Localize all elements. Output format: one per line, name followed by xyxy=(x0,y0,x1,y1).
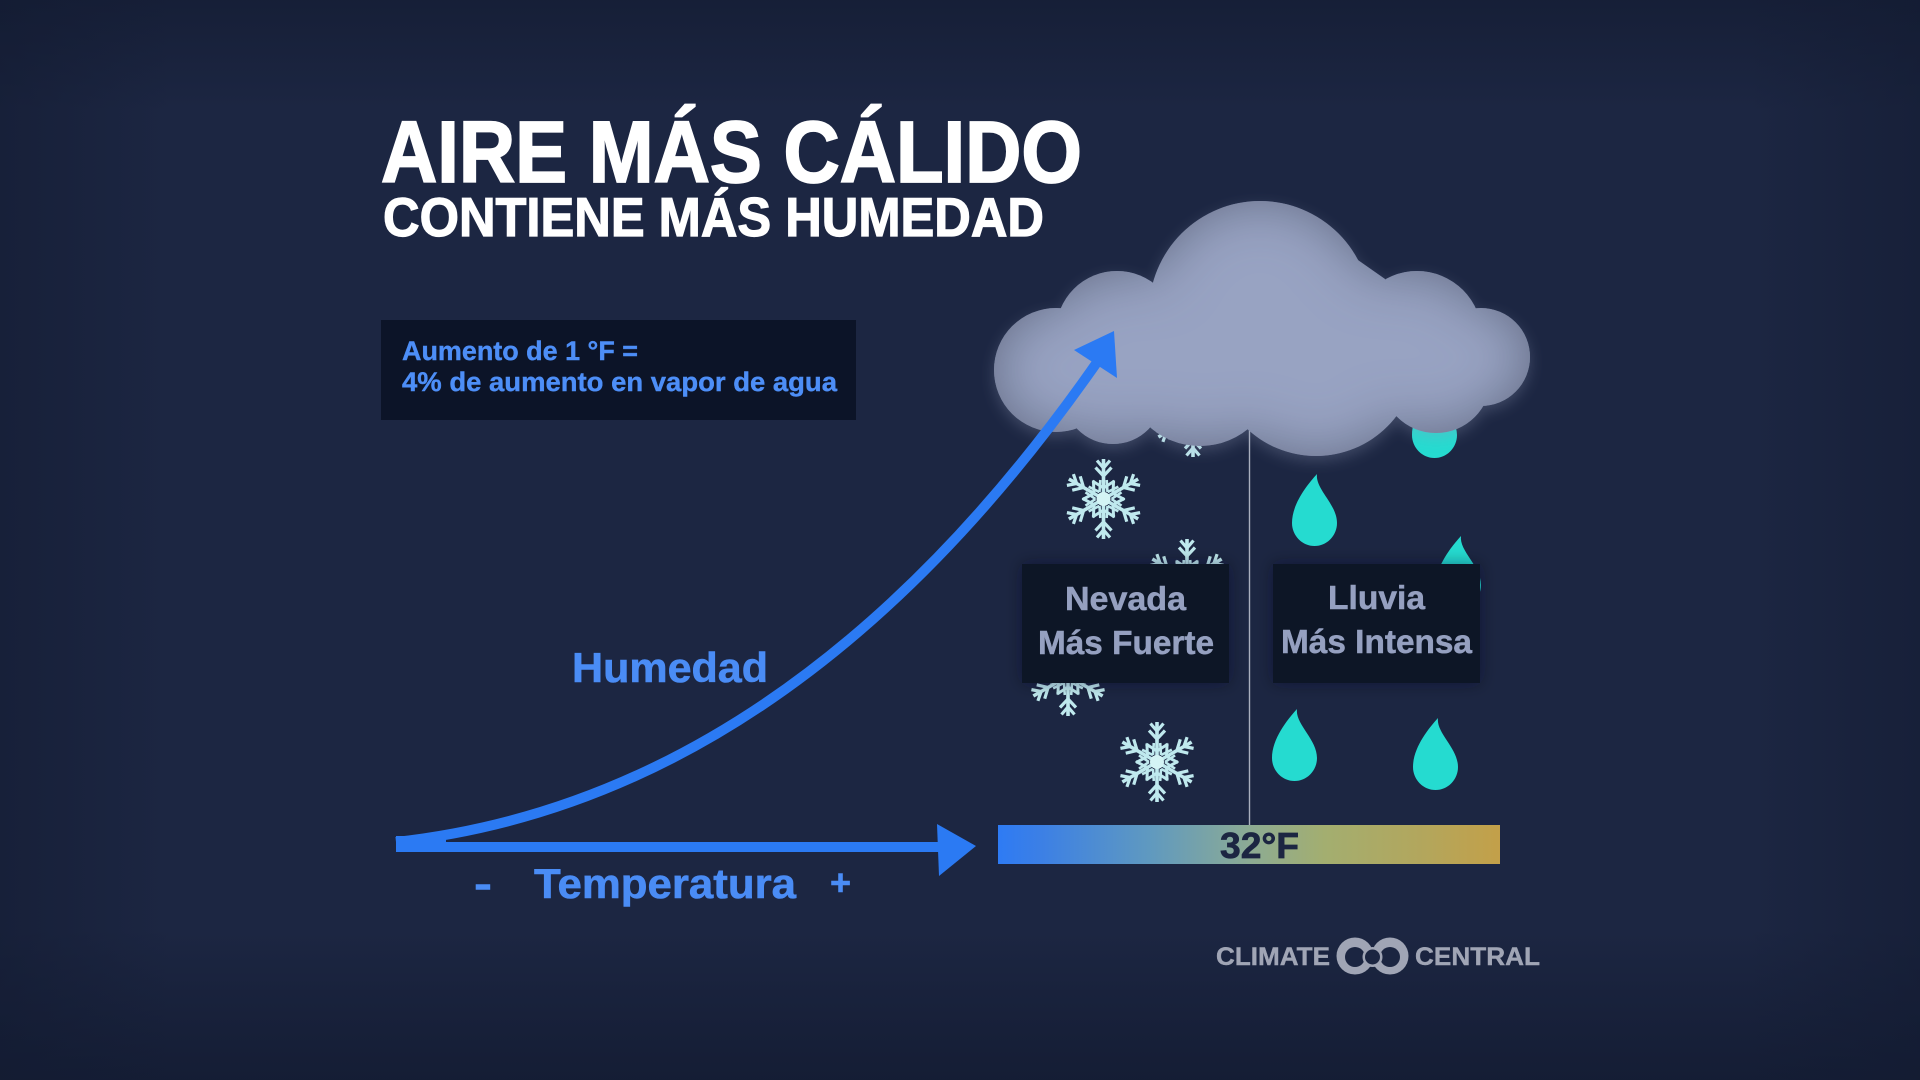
callout: 1°F rule xyxy=(381,320,856,420)
logo: Climate Central: CLIMATE xyxy=(1216,943,1330,971)
snowfall icons xyxy=(1028,377,1233,802)
logo: Climate Central xyxy=(1216,938,1540,974)
panel: rain label xyxy=(1273,564,1480,683)
panel: snow label xyxy=(1022,564,1229,683)
icon: snowflake behind label xyxy=(1147,539,1227,619)
callout: 1°F rule: 4% de aumento en vapor de agua xyxy=(402,367,838,397)
panel: snow label: Nevada xyxy=(1065,580,1187,617)
freezing point divider line xyxy=(1248,430,1250,826)
temperature gradient bar: 32°F xyxy=(1220,825,1299,866)
title line 2: CONTIENE MÁS HUMEDAD xyxy=(383,186,1044,248)
icon: snowflake partly under label xyxy=(1028,636,1108,716)
icon: snowflake lower xyxy=(1117,722,1197,802)
panel: rain label: Más Intensa xyxy=(1281,623,1473,660)
logo: Climate Central: CENTRAL xyxy=(1415,943,1540,971)
label: temperature axis: - xyxy=(474,860,492,907)
chart: humidity curve arrow xyxy=(396,331,1117,852)
callout: 1°F rule: Aumento de 1 °F = xyxy=(402,336,638,366)
icon: cloud xyxy=(994,201,1530,456)
title xyxy=(381,104,1082,248)
label: temperature axis xyxy=(474,860,851,907)
label: humidity: Humedad xyxy=(572,644,768,691)
label: temperature axis: Temperatura xyxy=(534,860,797,907)
icon: snowflake hidden behind cloud xyxy=(1153,377,1233,457)
icon: raindrop lower right xyxy=(1413,718,1458,790)
icon: raindrop behind label xyxy=(1436,536,1481,608)
panel: snow label: Más Fuerte xyxy=(1038,624,1214,661)
icon: raindrop behind cloud xyxy=(1412,386,1457,458)
chart: temperature axis arrow xyxy=(396,824,976,876)
icon: snowflake upper xyxy=(1063,459,1144,539)
temperature gradient bar xyxy=(998,825,1500,866)
icon: raindrop lower left xyxy=(1272,709,1317,781)
icon: raindrop upper xyxy=(1292,474,1337,546)
panel: rain label: Lluvia xyxy=(1328,579,1426,616)
rainfall icons xyxy=(1272,386,1481,790)
label: temperature axis: + xyxy=(830,862,851,903)
title line 1: AIRE MÁS CÁLIDO xyxy=(381,104,1082,201)
